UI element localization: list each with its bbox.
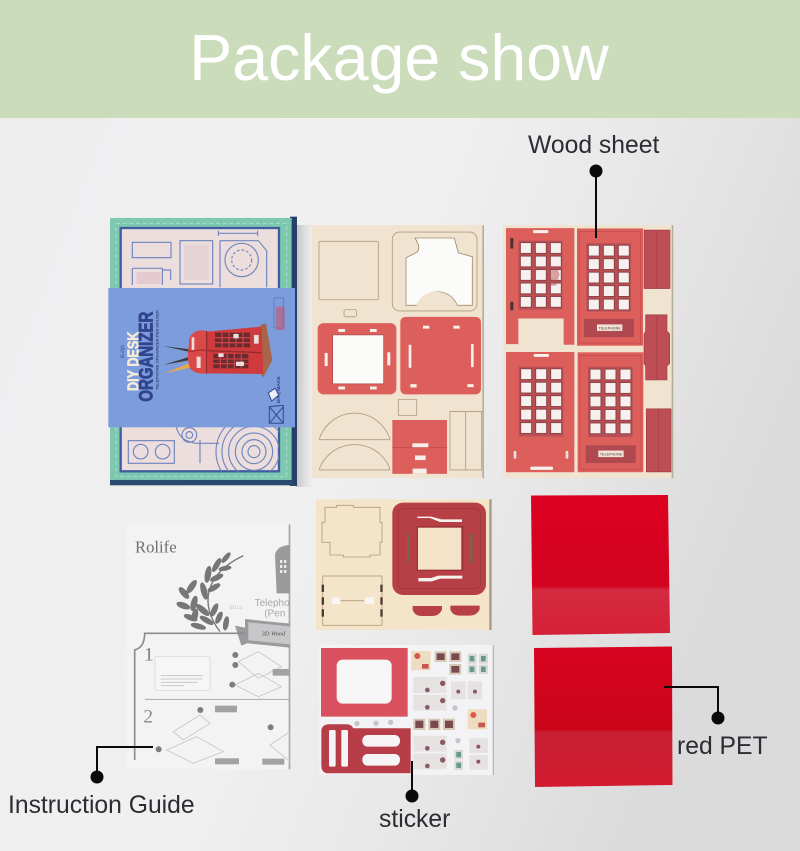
red window sticker bbox=[321, 648, 408, 717]
sticker sheet bbox=[319, 645, 494, 775]
stamp stickers bbox=[354, 651, 488, 770]
red PET sheet: bottom bbox=[534, 646, 672, 787]
brand logo bbox=[268, 388, 283, 423]
red door panel, bottom right bbox=[578, 352, 643, 472]
small red tabs bbox=[413, 606, 480, 616]
header banner bbox=[0, 0, 800, 118]
instruction guide: Telephone bbox=[255, 598, 301, 609]
instruction guide bbox=[134, 524, 290, 770]
box title: Rolife bbox=[119, 344, 126, 359]
callout: red PET: red PET bbox=[677, 733, 768, 760]
red door panel, bottom left bbox=[506, 352, 574, 472]
instruction guide: 1 bbox=[144, 645, 154, 666]
red square frame bbox=[318, 323, 396, 394]
red door panel, top left bbox=[506, 228, 574, 345]
product box with sleeve: DIY | MAKE bbox=[276, 376, 282, 403]
telephone booth image bbox=[163, 323, 272, 377]
instruction guide: TG13 bbox=[229, 605, 242, 611]
red frame piece bbox=[392, 503, 486, 595]
instruction guide: (Pen Holder) bbox=[264, 608, 321, 619]
wood sheet: right bbox=[503, 225, 673, 478]
instruction guide: 2 bbox=[143, 706, 153, 727]
red PET sheet: top bbox=[531, 495, 670, 635]
red square plate bbox=[400, 317, 481, 394]
callout: wood sheet: Wood sheet bbox=[528, 132, 659, 159]
laurel branch bbox=[176, 552, 243, 632]
wood sheet: left bbox=[312, 225, 484, 478]
product box with sleeve bbox=[108, 217, 297, 490]
red drawer piece bbox=[392, 420, 447, 474]
red door panel, top right bbox=[577, 228, 643, 346]
dark red frame sticker bbox=[321, 724, 411, 773]
callout: sticker: sticker bbox=[379, 806, 450, 833]
side strips bbox=[644, 230, 671, 472]
box title: TELEPHONE ORGANIZER PEN HOLDER bbox=[155, 309, 159, 390]
box title bbox=[119, 309, 159, 402]
callout: instruction guide bbox=[8, 747, 195, 819]
callout: wood sheet bbox=[528, 132, 659, 238]
callout: sticker bbox=[379, 761, 450, 833]
telephone booth drawing bbox=[275, 545, 290, 593]
instruction guide: 3D Wood bbox=[261, 631, 286, 638]
wood sheet: lower bbox=[316, 499, 494, 775]
cut-out outlines bbox=[322, 505, 382, 625]
cut-outs, upper area bbox=[319, 232, 482, 470]
callout: red PET bbox=[664, 687, 768, 760]
red door panel, top right: TELEPHONE bbox=[599, 326, 621, 330]
instruction guide: Rolife bbox=[135, 537, 177, 556]
box shadow on background bbox=[296, 225, 314, 487]
red door panel, bottom right: TELEPHONE bbox=[600, 452, 623, 456]
box title: DIY DESK bbox=[125, 331, 142, 391]
title: Package show bbox=[189, 22, 609, 94]
callout: instruction guide: Instruction Guide bbox=[8, 792, 195, 819]
box title: ORGANIZER bbox=[137, 312, 158, 402]
